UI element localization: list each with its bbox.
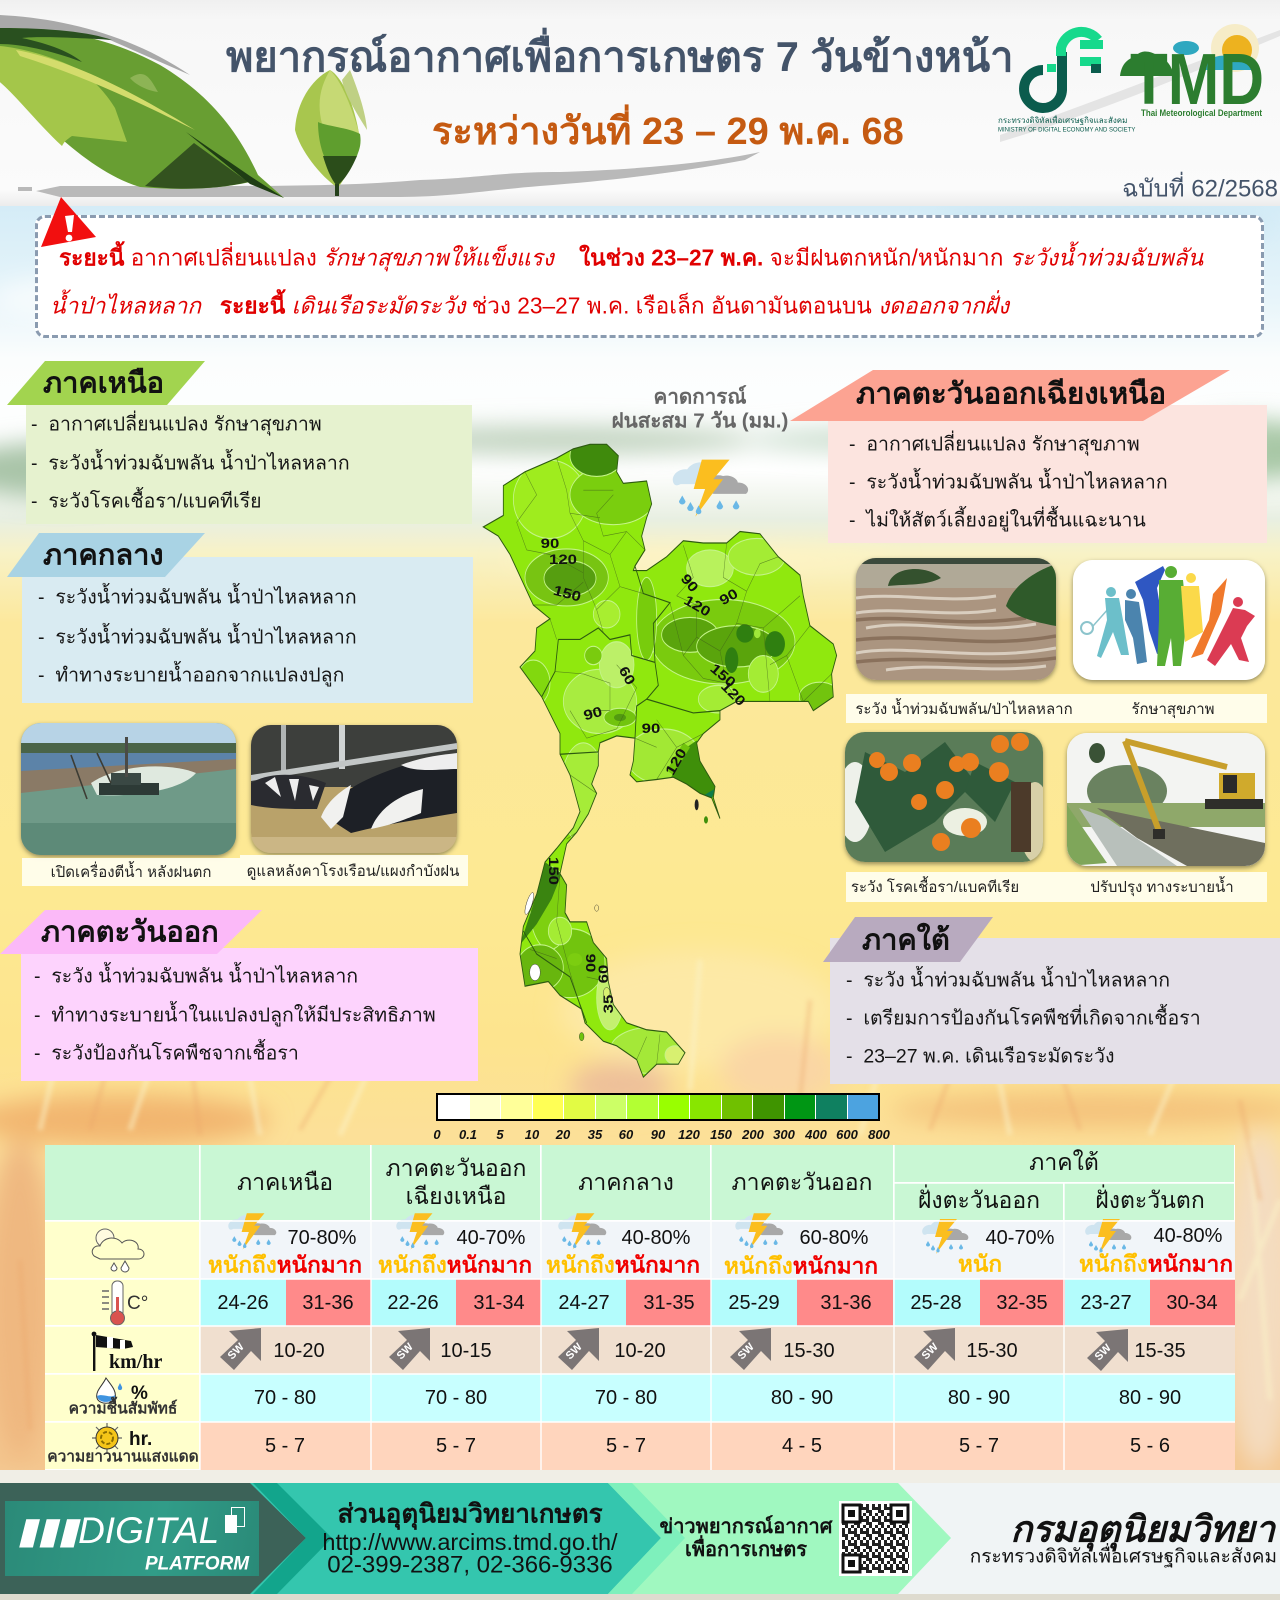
row: sunshine: 4 - 5 [782, 1435, 822, 1457]
row: wind: SW [920, 1341, 941, 1362]
captions: flood and health [846, 694, 1267, 723]
footer: agrometeorology contact [322, 1498, 618, 1579]
subtitle: date range: ระหว่างวันที่ 23 – 29 พ.ค. 68 [432, 111, 904, 153]
panel: south region: - 23–27 พ.ค. เดินเรือระมัดระวัง [846, 1045, 1115, 1067]
heading badge [0, 910, 262, 954]
photo: sports silhouettes [1073, 560, 1265, 680]
heading badge [7, 533, 205, 577]
QR code [839, 1501, 912, 1576]
row: wind: 15-35 [1134, 1340, 1186, 1362]
contour value labels: 90 [541, 536, 559, 552]
contour value labels: 90 [642, 721, 660, 737]
panel: central region: - ระวังน้ำท่วมฉับพลัน น้ำป่าไหลหลาก [38, 626, 357, 648]
captions: disease and drainage: ระวัง โรคเชื้อรา/แบคทีเรีย [851, 879, 1019, 896]
row: humidity: 70 - 80 [254, 1387, 316, 1409]
scale values: 35 [588, 1127, 602, 1142]
photo: flash flood [856, 558, 1056, 680]
row: humidity: 70 - 80 [425, 1387, 487, 1409]
icon: sun and cloud [92, 1228, 144, 1272]
panel: central region [7, 533, 473, 703]
icon: humidity drop: % [131, 1383, 148, 1404]
title: พยากรณ์อากาศเพื่อการเกษตร 7 วันข้างหน้า [226, 33, 1014, 80]
row: humidity [200, 1374, 1235, 1422]
contour value labels: 150 [552, 583, 583, 605]
row: sunshine: 5 - 7 [436, 1435, 476, 1457]
colour scale [436, 1093, 880, 1121]
row: sunshine: 5 - 7 [959, 1435, 999, 1457]
captions: disease and drainage [846, 872, 1267, 902]
row: temperature: 24-27 [558, 1292, 610, 1314]
caption: cows [240, 855, 468, 886]
scale values: 120 [678, 1127, 700, 1142]
wind speed values: 10-20 [273, 1340, 325, 1362]
panel: central region: - ทำทางระบายน้ำออกจากแปลงปลูก [38, 664, 344, 686]
table header row: ภาคกลาง [578, 1169, 674, 1195]
table header row: ฝั่งตะวันออก [918, 1187, 1040, 1213]
contour value labels: 120 [681, 593, 713, 620]
contour value labels: 60 [615, 664, 638, 688]
row: sunshine: 5 - 7 [265, 1435, 305, 1457]
warning text: น้ำป่าไหลหลาก ระยะนี้ เดินเรือระมัดระวัง ช่วง 23–27 พ.ค. เรือเล็ก อันดามันตอนบน งดออกจากฝั่ง [50, 292, 1009, 318]
captions: flood and health: ระวัง น้ำท่วมฉับพลัน/ป่าไหลหลาก [855, 700, 1073, 718]
icon: warning triangle [41, 197, 96, 247]
row: temperature: 25-28 [910, 1292, 962, 1314]
scale values: 20 [556, 1127, 570, 1142]
row: temperature: 32-35 [996, 1292, 1048, 1314]
contour value labels: 90 [582, 704, 604, 724]
logo: Ministry of Digital Economy and Society: กระทรวงดิจิทัลเพื่อเศรษฐกิจและสังคม [998, 116, 1127, 125]
row: sunshine: 5 - 7 [606, 1435, 646, 1457]
region and province borders [517, 458, 832, 1064]
table header row: ภาคตะวันออก [386, 1155, 526, 1181]
row: temperature: 22-26 [387, 1292, 439, 1314]
scale values: 5 [496, 1127, 504, 1142]
scale values: 400 [805, 1127, 827, 1142]
panel: northeast region [790, 370, 1267, 543]
footer: QR caption [660, 1515, 833, 1561]
scale values: 60 [619, 1127, 633, 1142]
row: wind: 10-20 [614, 1340, 666, 1362]
heading: ภาคใต้ [862, 925, 950, 957]
icon: wind sock with unit: km/hr [109, 1351, 162, 1373]
icon: thermometer: C° [127, 1293, 148, 1314]
logo: digital platform: ▮▮▮DIGITAL [17, 1510, 219, 1551]
captions: disease and drainage: ปรับปรุง ทางระบายน้ำ [1090, 879, 1234, 896]
footer: agrometeorology contact: http://www.arcims.tmd.go.th/ [322, 1529, 618, 1555]
rain severity: หนักถึงหนักมาก [208, 1252, 362, 1277]
bullet list: - ระวัง น้ำท่วมฉับพลัน น้ำป่าไหลหลาก [34, 965, 358, 987]
contour value labels: 35 [601, 994, 617, 1013]
rain chance values: 70-80% [288, 1227, 356, 1249]
logo: Ministry of Digital Economy and Society [998, 26, 1136, 133]
small leaf [295, 70, 360, 188]
row: humidity: 80 - 90 [1119, 1387, 1181, 1409]
contour value labels: 120 [663, 746, 690, 778]
bullet list: - อากาศเปลี่ยนแปลง รักษาสุขภาพ [849, 433, 1140, 455]
panel body [22, 557, 473, 703]
heading: ภาคเหนือ [43, 368, 164, 400]
table header row: ฝั่งตะวันตก [1095, 1187, 1205, 1213]
big leaf [0, 28, 284, 198]
map heading: ฝนสะสม 7 วัน (มม.) [612, 410, 788, 433]
row: temperature [200, 1279, 1235, 1326]
scale values: 10 [525, 1127, 539, 1142]
scale values: 800 [868, 1127, 890, 1142]
scale values: 150 [710, 1127, 732, 1142]
panel: northeast region: - ระวังน้ำท่วมฉับพลัน น้ำป่าไหลหลาก [849, 471, 1168, 493]
row: temperature: 31-36 [820, 1292, 872, 1314]
icon: sun with unit: hr. [129, 1429, 152, 1450]
logo: digital platform: PLATFORM [145, 1554, 249, 1575]
panel body [828, 405, 1267, 543]
photo: dairy cows [251, 725, 457, 853]
map heading [612, 385, 788, 433]
row: wind: SW [564, 1341, 585, 1362]
scale values [433, 1127, 890, 1142]
label: sunshine duration: ความยาวนานแสงแดด [47, 1449, 199, 1466]
row: rain: หนักถึงหนักมาก [546, 1252, 700, 1277]
icon: wind sock with unit [92, 1332, 162, 1373]
panel: south region [823, 917, 1280, 1084]
captions: flood and health: รักษาสุขภาพ [1131, 700, 1215, 718]
heading badge [7, 361, 205, 405]
forecast table [45, 1145, 1235, 1470]
row: wind: 15-30 [966, 1340, 1018, 1362]
scale values: 600 [836, 1127, 858, 1142]
row: wind [200, 1326, 1235, 1374]
icon: humidity drop [96, 1377, 148, 1404]
panel: warning box [35, 215, 1264, 338]
bullet list: - ระวัง น้ำท่วมฉับพลัน น้ำป่าไหลหลาก [846, 969, 1170, 991]
logo: digital platform [5, 1501, 259, 1576]
contour value labels: 90 [582, 954, 598, 972]
panel: north region: - ระวังน้ำท่วมฉับพลัน น้ำป่าไหลหลาก [31, 452, 350, 474]
row: rain: หนักถึงหนักมาก [724, 1253, 878, 1278]
contour value labels: 90 [677, 571, 701, 595]
contour value labels: 120 [549, 552, 577, 568]
photo: excavator in canal [1067, 733, 1265, 866]
scale values: 200 [742, 1127, 764, 1142]
row: rain [200, 1221, 1235, 1279]
scale values: 0.1 [459, 1127, 477, 1142]
heading: ภาคตะวันออกเฉียงเหนือ [856, 377, 1166, 410]
row: rain: 40-70% [986, 1227, 1054, 1249]
warning text: ระยะนี้ อากาศเปลี่ยนแปลง รักษาสุขภาพให้แข็งแรง ในช่วง 23–27 พ.ค. จะมีฝนตกหนัก/หนักมาก ระวังน้ำท่วมฉับพลัน [59, 244, 1203, 270]
scale values: 0 [433, 1127, 441, 1142]
table header row: ภาคตะวันออก [732, 1169, 872, 1195]
row: temperature: 31-36 [302, 1292, 354, 1314]
panel: north region: - ระวังโรคเชื้อรา/แบคทีเรีย [31, 490, 262, 512]
panel: east region: - ทำทางระบายน้ำในแปลงปลูกให้มีประสิทธิภาพ [34, 1004, 436, 1026]
footer: QR caption: เพื่อการเกษตร [685, 1539, 807, 1561]
contour value labels [541, 536, 748, 1013]
row: rain: 60-80% [800, 1227, 868, 1249]
row: wind: SW [1093, 1342, 1114, 1363]
grey swoosh [0, 15, 190, 75]
map heading: คาดการณ์ [654, 386, 746, 409]
bullet list: - อากาศเปลี่ยนแปลง รักษาสุขภาพ [31, 413, 322, 435]
row: humidity: 80 - 90 [948, 1387, 1010, 1409]
row: humidity: 70 - 80 [595, 1387, 657, 1409]
footer band [0, 1483, 1280, 1594]
row: wind: 10-15 [440, 1340, 492, 1362]
panel: east region: - ระวังป้องกันโรคพืชจากเชื้อรา [34, 1042, 299, 1064]
row: temperature: 23-27 [1080, 1292, 1132, 1314]
scale values: 300 [773, 1127, 795, 1142]
table header row [45, 1145, 1235, 1221]
table header row: ภาคใต้ [1029, 1149, 1099, 1175]
logo: Ministry of Digital Economy and Society: MINISTRY OF DIGITAL ECONOMY AND SOCIETY [998, 127, 1135, 133]
panel body [21, 948, 478, 1081]
heading badge [823, 917, 993, 962]
icon: sun with unit [92, 1423, 152, 1452]
row: temperature: 31-34 [473, 1292, 525, 1314]
row: temperature: 30-34 [1166, 1292, 1218, 1314]
header band with leaves [0, 0, 1280, 206]
warning text [50, 241, 1204, 318]
panel: northeast region: - ไม่ให้สัตว์เลี้ยงอยู่ในที่ชื้นแฉะนาน [849, 509, 1146, 531]
contour value labels: 60 [596, 965, 612, 983]
row: wind: SW [395, 1341, 416, 1362]
row: rain: หนักถึงหนักมาก [1079, 1251, 1233, 1276]
heading: ภาคกลาง [43, 540, 164, 572]
row: rain: 40-70% [457, 1227, 525, 1249]
heading badge [790, 370, 1230, 421]
heading: ภาคตะวันออก [41, 917, 219, 949]
footer: QR caption: ข่าวพยากรณ์อากาศ [660, 1516, 832, 1538]
label: relative humidity: ความชื้นสัมพัทธ์ [69, 1401, 177, 1418]
panel body [830, 938, 1280, 1084]
wind direction arrows: SW [226, 1341, 247, 1362]
row: sunshine [200, 1422, 1235, 1470]
caption: aerator [22, 858, 240, 886]
panel: north region [7, 361, 472, 524]
panel body [26, 405, 472, 524]
contour value labels: 120 [718, 679, 748, 709]
row: rain: หนัก [958, 1251, 1002, 1276]
table grid lines [45, 1145, 1235, 1470]
panel: south region: - เตรียมการป้องกันโรคพืชที่เกิดจากเชื้อรา [846, 1007, 1201, 1029]
row: temperature: 31-35 [643, 1292, 695, 1314]
footer: department name [970, 1508, 1277, 1568]
row: wind: 15-30 [783, 1340, 835, 1362]
row: wind: SW [736, 1341, 757, 1362]
contour value labels: 90 [717, 586, 741, 609]
footer: department name: กระทรวงดิจิทัลเพื่อเศรษฐกิจและสังคม [970, 1547, 1277, 1568]
rainfall legend [433, 1093, 890, 1142]
row: sunshine: 5 - 6 [1130, 1435, 1170, 1457]
chart: rainfall map of Thailand [482, 444, 838, 1078]
icon: storm cloud [673, 460, 748, 517]
row: humidity: 80 - 90 [771, 1387, 833, 1409]
icon: thermometer [102, 1280, 148, 1326]
row: temperature: 25-29 [728, 1292, 780, 1314]
footer: agrometeorology contact: 02-399-2387, 02-366-9336 [327, 1552, 613, 1579]
caption: aerator: เปิดเครื่องตีน้ำ หลังฝนตก [51, 864, 211, 881]
table header row: ภาคเหนือ [237, 1169, 333, 1195]
temperature values: 24-26 [217, 1292, 269, 1314]
panel: east region [0, 910, 478, 1081]
photo: aerator in pond [21, 723, 236, 855]
caption: cows: ดูแลหลังคาโรงเรือน/แผงกำบังฝน [247, 862, 459, 880]
row: rain: หนักถึงหนักมาก [378, 1252, 532, 1277]
rain icons [228, 1213, 276, 1250]
wind direction arrows [220, 1328, 261, 1370]
footer: department name: กรมอุตุนิยมวิทยา [1010, 1508, 1275, 1549]
footer: agrometeorology contact: ส่วนอุตุนิยมวิทยาเกษตร [337, 1498, 603, 1528]
issue number: ฉบับที่ 62/2568 [1122, 176, 1278, 203]
contour value labels: 150 [545, 857, 561, 885]
table header row: เฉียงเหนือ [406, 1183, 506, 1209]
contour value labels: 150 [707, 661, 738, 691]
photo: orange tree [845, 732, 1043, 862]
scale values: 90 [651, 1127, 665, 1142]
bullet list: - ระวังน้ำท่วมฉับพลัน น้ำป่าไหลหลาก [38, 586, 357, 608]
row labels column [45, 1221, 200, 1470]
row: rain: 40-80% [622, 1227, 690, 1249]
row: rain: 40-80% [1154, 1225, 1222, 1247]
